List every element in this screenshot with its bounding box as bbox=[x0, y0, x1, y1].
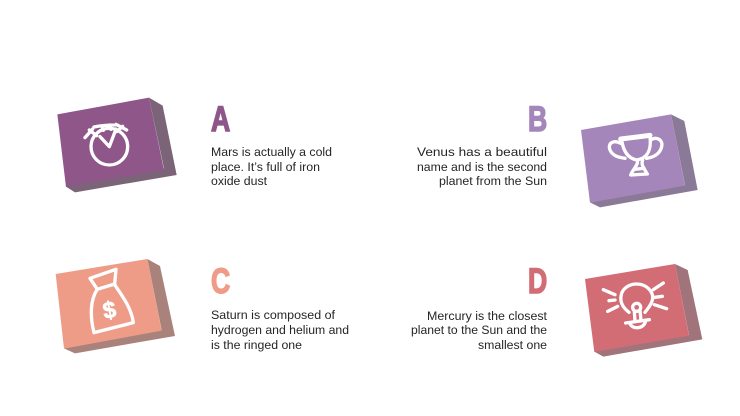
block: B lilac bbox=[581, 114, 698, 207]
icon: money bag: $ bbox=[101, 296, 118, 324]
icon: trophy bbox=[609, 135, 662, 175]
text: Mars: Mars is actually a cold bbox=[211, 145, 332, 159]
text: Mercury: smallest one bbox=[478, 338, 547, 352]
text: Mercury: Mercury is the closest bbox=[427, 309, 548, 323]
text: Venus: Venus has a beautiful bbox=[417, 145, 547, 159]
letter D: D bbox=[528, 261, 547, 301]
block: D rose bbox=[585, 264, 702, 357]
text: Saturn: hydrogen and helium and bbox=[211, 323, 349, 337]
text: Mercury: planet to the Sun and the bbox=[411, 323, 547, 337]
block: A purple bbox=[57, 98, 177, 192]
text: Venus: planet from the Sun bbox=[439, 174, 547, 188]
text: Venus bbox=[417, 145, 547, 188]
text: Saturn: is the ringed one bbox=[211, 338, 302, 352]
letter C: C bbox=[211, 261, 230, 301]
text: Mars: oxide dust bbox=[211, 174, 268, 188]
text: Mercury bbox=[411, 309, 548, 352]
panel: B bbox=[417, 99, 698, 207]
panel: D bbox=[411, 261, 702, 357]
block: C salmon bbox=[56, 259, 175, 353]
icon: light bulb bbox=[603, 283, 667, 328]
text: Saturn bbox=[211, 308, 349, 352]
text: Venus: name and is the second bbox=[417, 160, 547, 174]
icon: money bag bbox=[90, 269, 133, 333]
text: Mars: place. It’s full of iron bbox=[211, 160, 320, 174]
letter B: B bbox=[528, 99, 547, 139]
panel: A bbox=[57, 98, 332, 192]
icon: stopwatch bbox=[85, 124, 128, 165]
text: Saturn: Saturn is composed of bbox=[211, 308, 336, 322]
text: Mars bbox=[211, 145, 332, 188]
letter A: A bbox=[211, 99, 230, 139]
panel: C bbox=[56, 259, 349, 353]
